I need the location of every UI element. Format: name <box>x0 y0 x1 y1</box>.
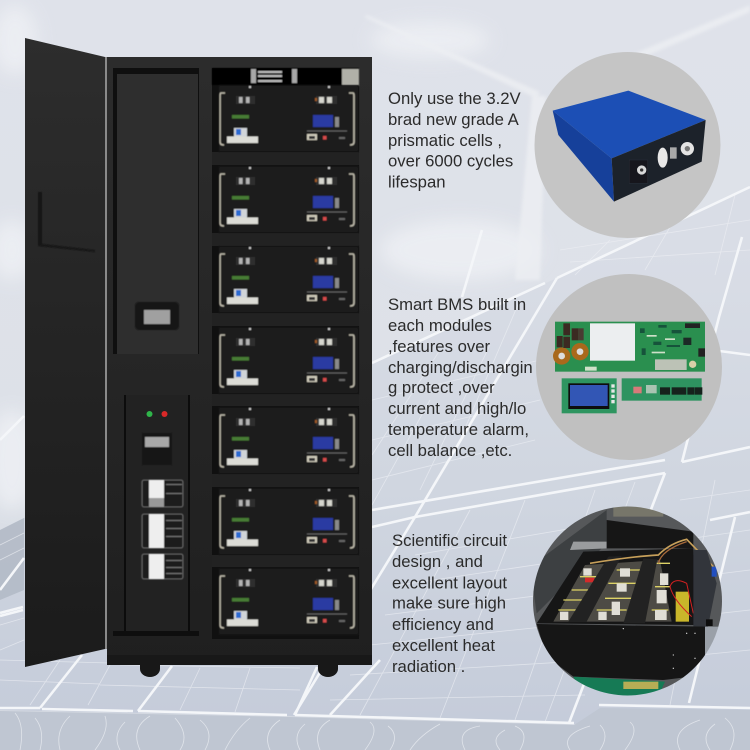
text: circuit design: excellent heat <box>392 636 495 655</box>
circle: prismatic cell <box>534 52 720 238</box>
lower control panel <box>113 395 199 636</box>
battery module 7 <box>219 568 359 635</box>
main BMS board <box>553 322 705 372</box>
bright panel frames <box>0 187 750 723</box>
LCD board <box>562 378 617 413</box>
text: circuit design: radiation . <box>392 657 465 676</box>
text: circuit design: efficiency and <box>392 615 494 634</box>
text: circuit design: design , and <box>392 552 483 571</box>
breaker group 2 <box>142 514 183 548</box>
top cable strip <box>212 68 359 86</box>
wiring <box>590 539 713 567</box>
text: cells <box>388 89 522 192</box>
meter display <box>142 433 172 465</box>
circle: BMS boards <box>536 274 722 460</box>
shelf rails <box>212 152 359 567</box>
text: BMS: cell balance ,etc. <box>388 441 512 460</box>
battery module 4 <box>219 327 359 394</box>
red indicator <box>162 411 168 417</box>
text: BMS: current and high/lo <box>388 399 526 418</box>
text: BMS: charging/dischargin <box>388 358 533 377</box>
text: BMS: ,features over <box>388 337 490 356</box>
breaker group 3 <box>142 554 183 579</box>
cabinet body <box>107 57 372 677</box>
right wheel <box>318 665 338 677</box>
text: cells: lifespan <box>388 172 446 192</box>
battery module 5 <box>219 407 359 474</box>
battery bay <box>212 68 359 639</box>
text: cells: Only use the 3.2V <box>388 89 522 108</box>
open cabinet door <box>25 38 107 667</box>
icon: blue prismatic cell <box>553 91 706 202</box>
fine cell grid <box>0 195 750 722</box>
left wheel <box>140 665 160 677</box>
front plate <box>537 624 705 680</box>
cover straps <box>568 556 622 622</box>
green indicator <box>146 411 152 417</box>
battery tray <box>537 548 695 625</box>
text: cells: over 6000 cycles <box>388 152 513 170</box>
connector board <box>622 378 702 401</box>
text: circuit design: excellent layout <box>392 574 507 592</box>
text: BMS: each modules <box>388 316 492 335</box>
battery module 6 <box>219 488 359 555</box>
text: BMS: Smart BMS built in <box>388 295 526 314</box>
door latch with display <box>135 302 179 330</box>
text: BMS: g protect ,over <box>388 378 495 397</box>
text: BMS: temperature alarm, <box>388 420 529 439</box>
text: circuit design <box>392 531 507 676</box>
text: cells: brad new grade A <box>388 110 520 129</box>
upper inner panel <box>113 68 199 354</box>
door handle recess <box>38 192 95 252</box>
text: circuit design: make sure high <box>392 594 506 612</box>
text: BMS <box>388 295 533 460</box>
text: circuit design: Scientific circuit <box>392 531 507 550</box>
circle: open battery module photo <box>533 506 722 696</box>
battery module 2 <box>219 166 359 233</box>
battery module 3 <box>219 246 359 313</box>
battery module 1 <box>219 85 359 152</box>
text: cells: prismatic cells , <box>388 131 502 150</box>
breaker group 1 <box>142 480 183 507</box>
